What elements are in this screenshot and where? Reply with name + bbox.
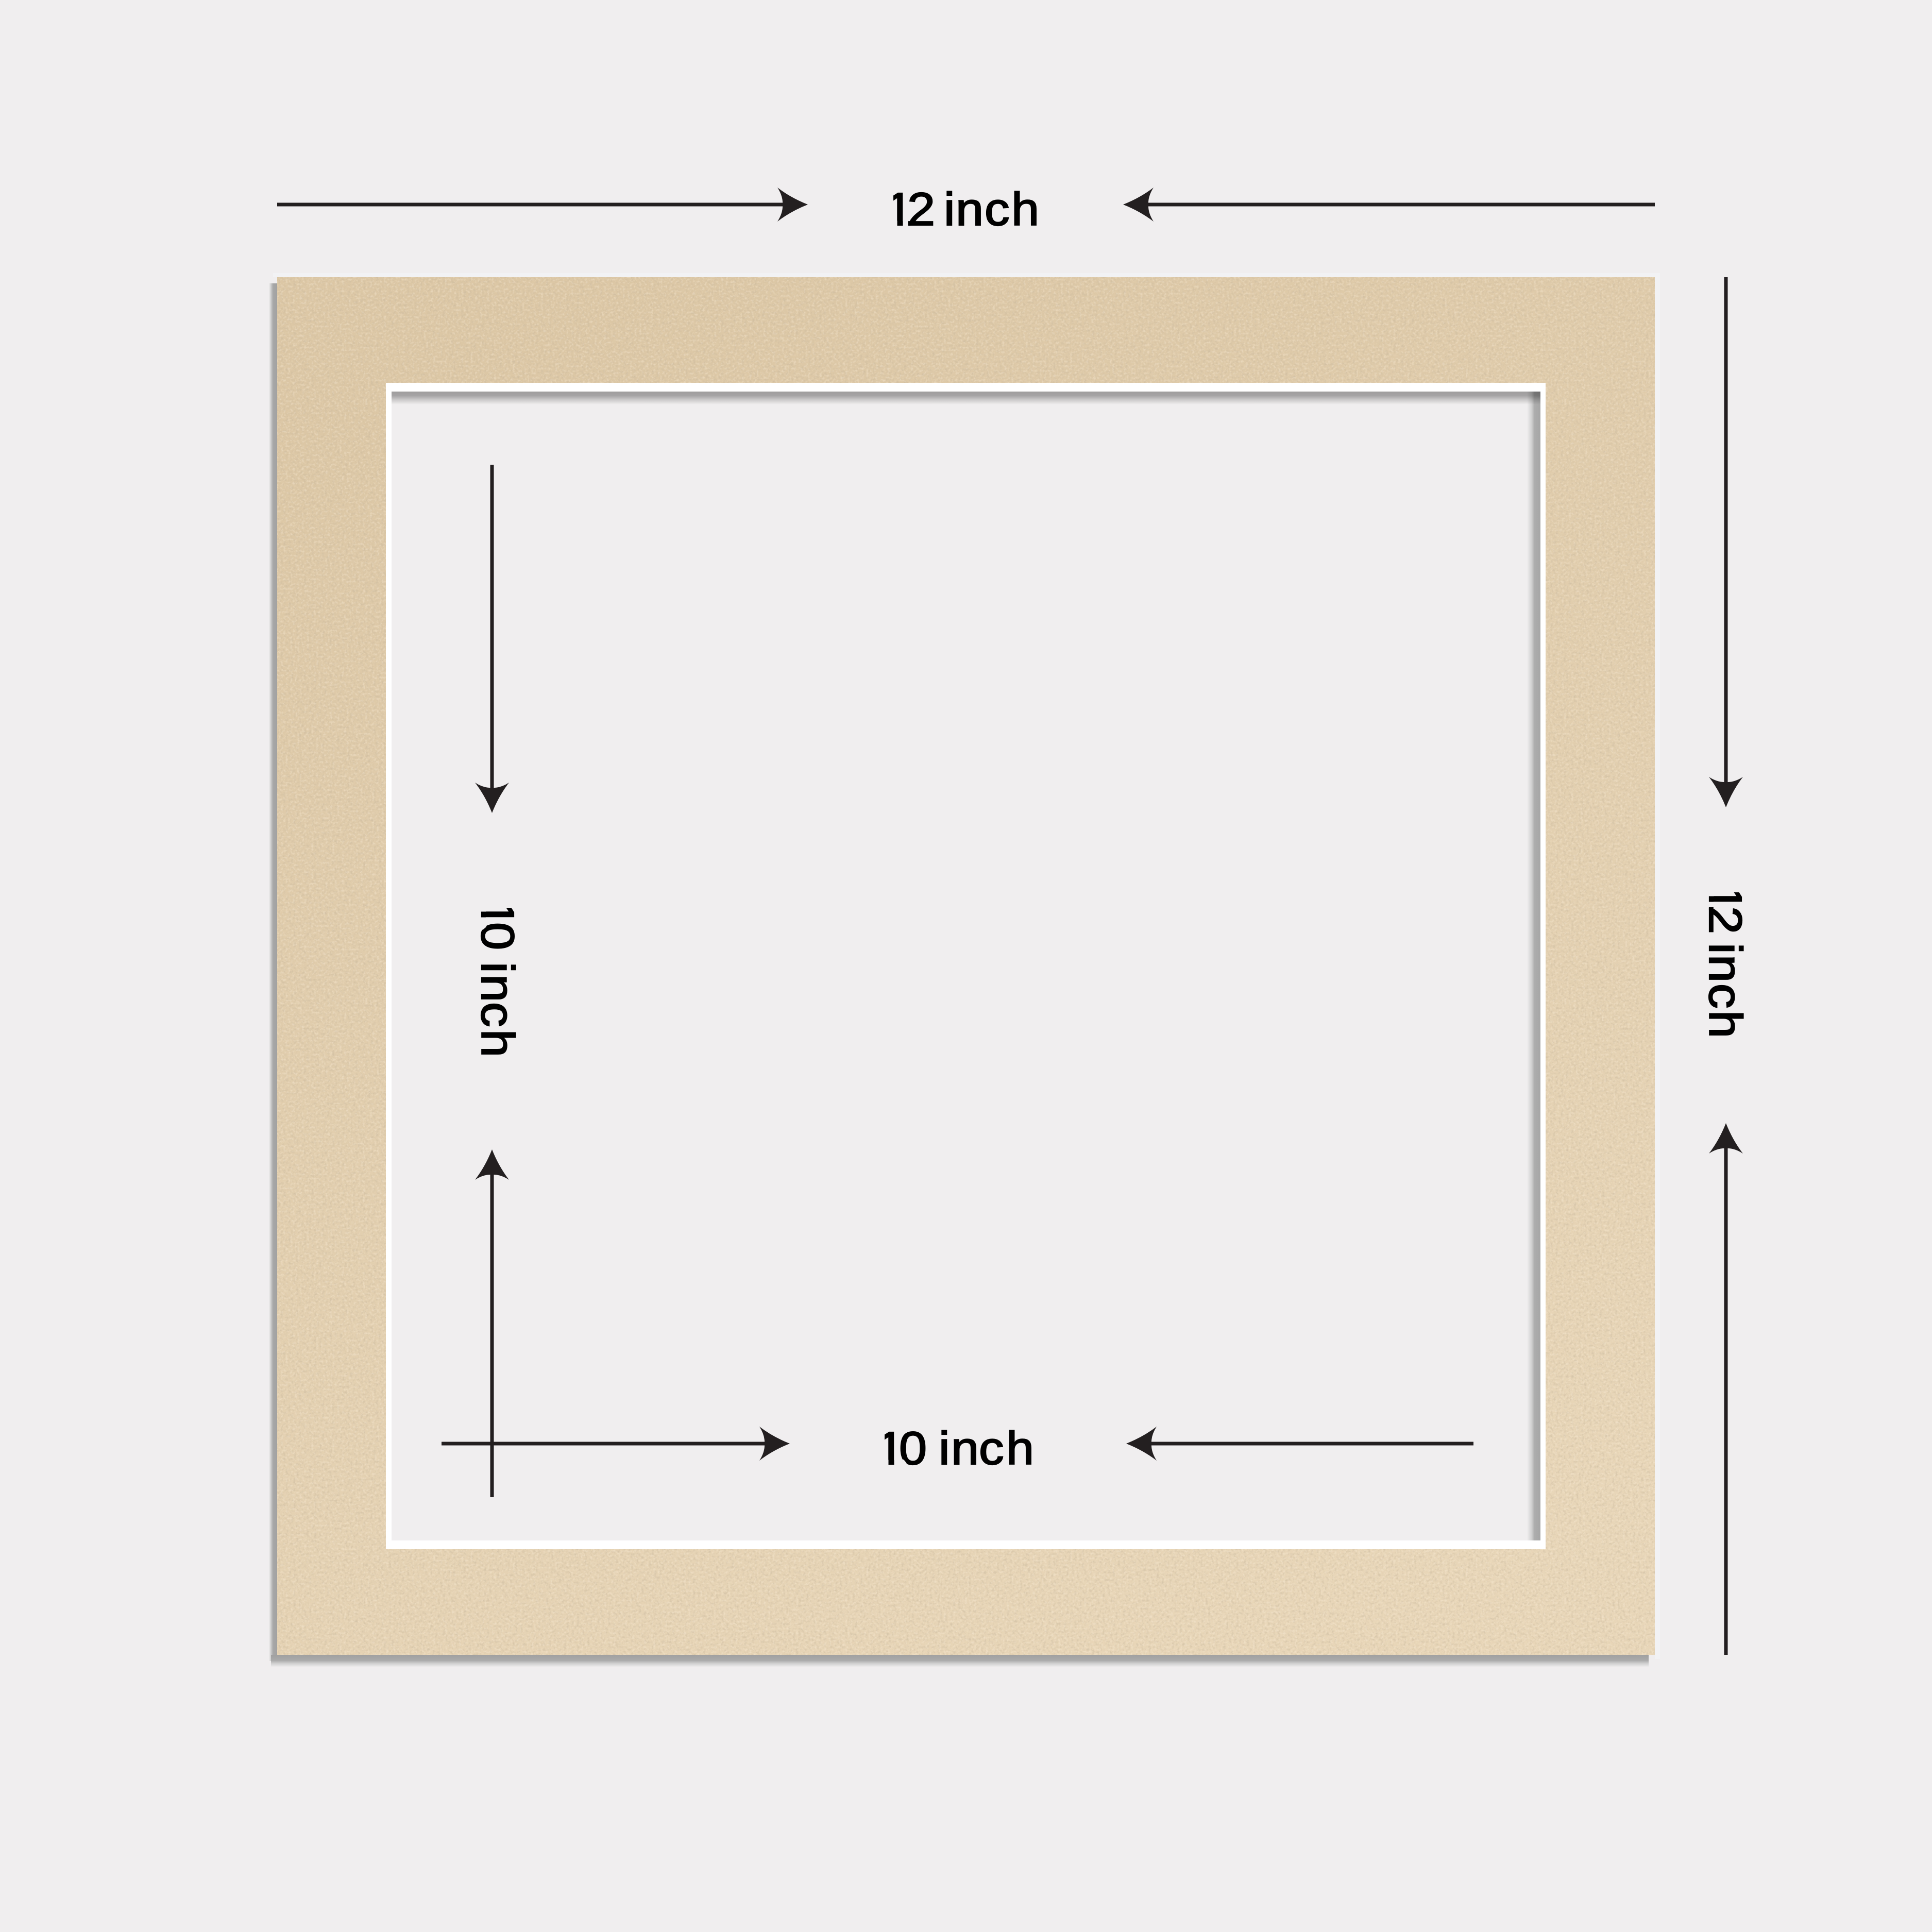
mat drop shadow bbox=[269, 273, 1660, 1667]
arrow: inner left top, pointing down bbox=[475, 465, 509, 813]
mat board surface bbox=[277, 277, 1655, 1655]
arrow: inner bottom right, pointing left bbox=[1126, 1427, 1473, 1461]
arrow: top right, pointing left bbox=[1123, 188, 1655, 222]
arrow: right side bottom, pointing up bbox=[1709, 1123, 1743, 1655]
white bevel of opening bbox=[386, 383, 1546, 1549]
arrow: inner left bottom, pointing up bbox=[475, 1149, 509, 1497]
arrow: top left, pointing right bbox=[277, 188, 808, 222]
arrow: inner bottom left, pointing right bbox=[442, 1427, 790, 1461]
panel: mat board bbox=[269, 273, 1660, 1667]
label: inner left 10 inch: 10 inch bbox=[472, 900, 524, 1057]
mat opening bbox=[392, 392, 1540, 1540]
label: top 12 inch: 12 inch bbox=[885, 183, 1039, 235]
arrow: right side top, pointing down bbox=[1709, 277, 1743, 807]
label: right 12 inch: 12 inch bbox=[1700, 884, 1752, 1038]
label: inner bottom 10 inch: 10 inch bbox=[876, 1422, 1034, 1474]
